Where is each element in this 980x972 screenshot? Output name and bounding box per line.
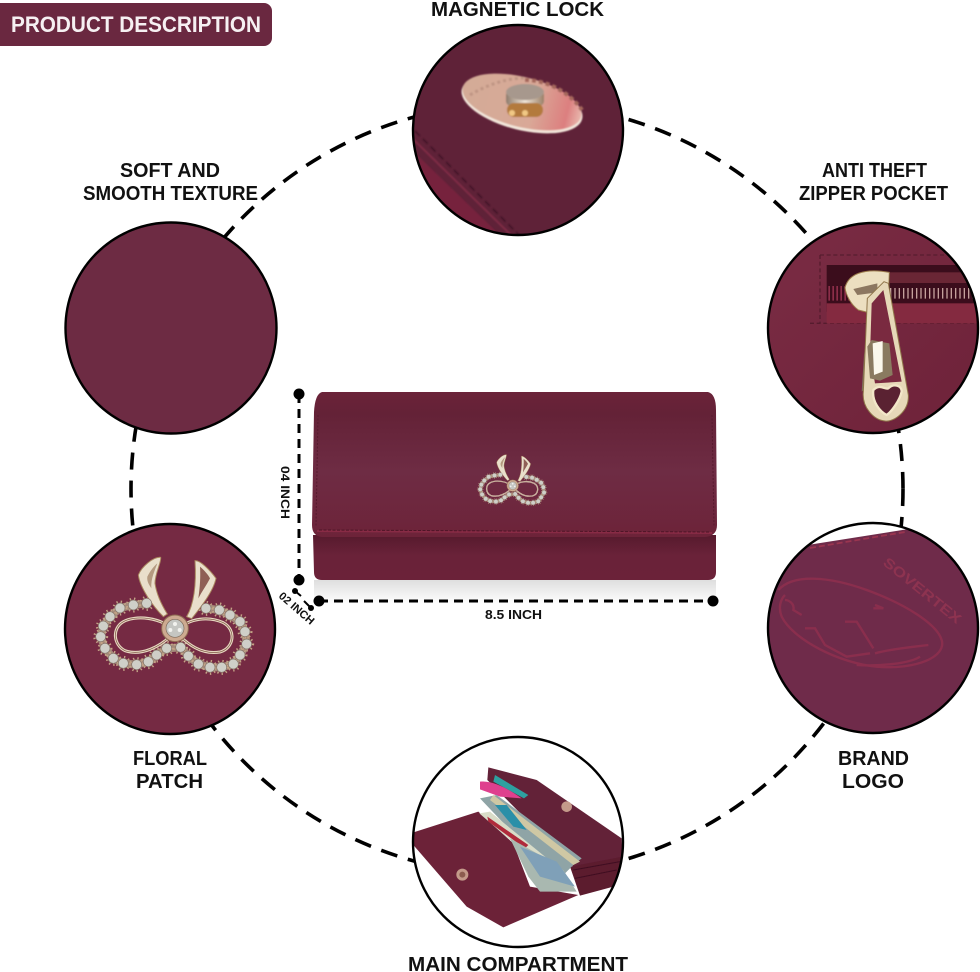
stitched flap edge (412, 131, 520, 240)
dimension: depth 02 inch: 02 INCH (276, 590, 316, 628)
dashed connector ring (131, 103, 903, 875)
embossed logo (778, 579, 942, 667)
header badge: product description (0, 3, 272, 46)
wallet body (313, 535, 716, 580)
dimension: height 04 inch (278, 388, 304, 586)
open flap (413, 812, 578, 927)
panel: magnetic lock close-up (412, 25, 623, 240)
label: soft and smooth texture: SMOOTH TEXTURE (83, 183, 258, 205)
panel: brand logo close-up (768, 505, 978, 733)
label: anti theft zipper pocket: ANTI THEFT (822, 160, 927, 182)
panel: soft and smooth texture swatch (66, 222, 276, 434)
panel: main compartment close-up (413, 737, 623, 947)
panel: zipper pocket close-up (768, 223, 980, 433)
label: brand logo: BRAND (838, 748, 909, 770)
label: soft and smooth texture: SOFT AND (120, 160, 220, 182)
dimension: width 8.5 inch: 8.5 INCH (485, 607, 542, 622)
dimension: height 04 inch: 04 INCH (278, 466, 292, 519)
label: anti theft zipper pocket (799, 160, 948, 205)
label: soft and smooth texture (83, 160, 258, 205)
pink and teal cards (493, 775, 528, 798)
embossed brand text: SOVERTEX (880, 554, 965, 627)
metal clasp plate (460, 72, 584, 134)
wallet shadow (314, 580, 716, 604)
label: floral patch (133, 748, 207, 793)
panel: wallet product photo with dimensions (276, 388, 718, 628)
zipper pull with heart ring (845, 271, 908, 421)
banknotes and card slots (480, 795, 582, 873)
dimension: width 8.5 inch (314, 596, 718, 622)
wallet brooch (477, 455, 547, 506)
label: brand logo: LOGO (842, 771, 904, 793)
label: brand logo (838, 748, 909, 793)
label: anti theft zipper pocket: ZIPPER POCKET (799, 183, 948, 205)
panel: floral patch close-up (65, 524, 275, 734)
wallet flap (312, 392, 717, 537)
label: floral patch: PATCH (136, 771, 203, 793)
label: floral patch: FLORAL (133, 748, 207, 770)
open wallet back panel (487, 767, 623, 870)
zipper opening and teeth (810, 255, 980, 323)
white corner above wallet edge (812, 524, 906, 544)
front pockets (570, 857, 623, 896)
header badge: product description: PRODUCT DESCRIPTION (11, 12, 261, 37)
